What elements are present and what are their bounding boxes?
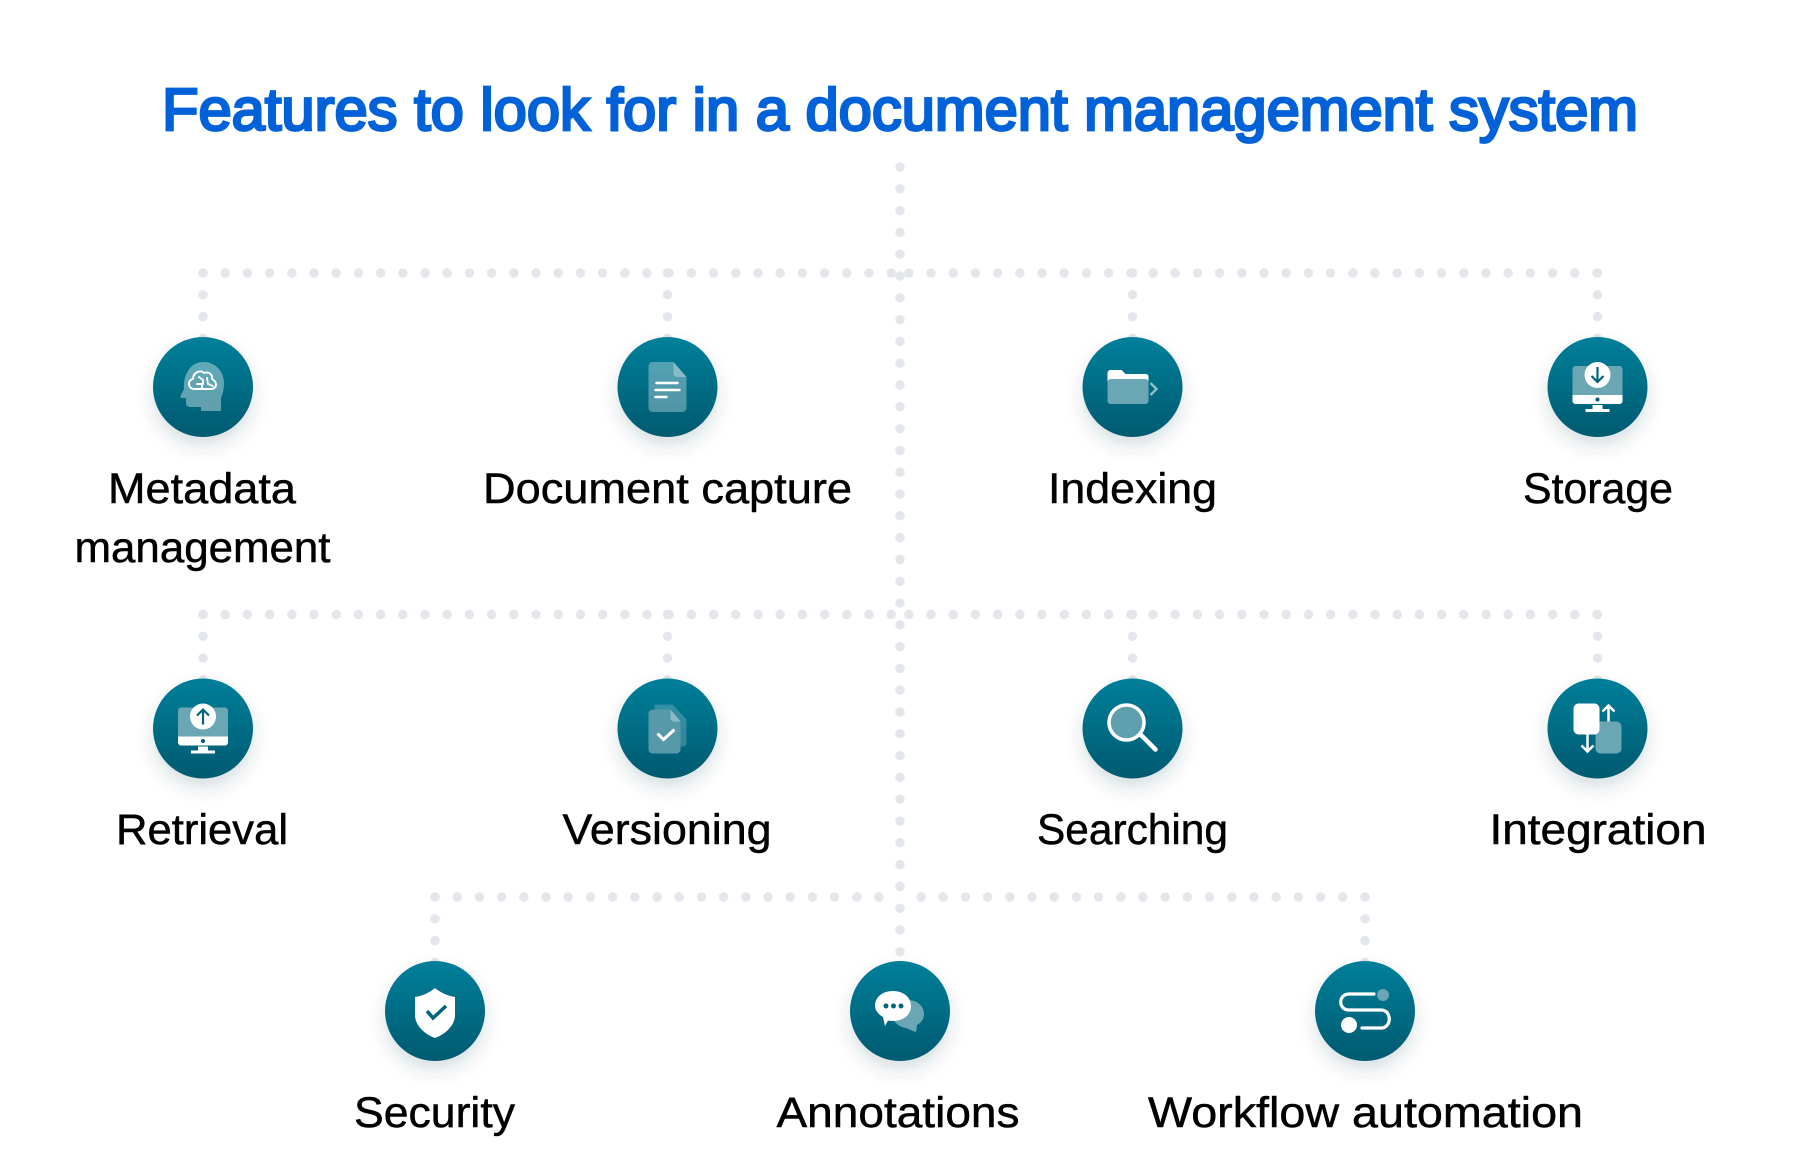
label: Metadata [108, 465, 296, 513]
label: Indexing [1048, 465, 1217, 513]
label: management [74, 524, 331, 572]
icon badge: metadata head [153, 337, 253, 437]
label: Annotations [776, 1089, 1020, 1137]
feature: Security [354, 961, 516, 1137]
icon badge: magnifier [1082, 678, 1182, 778]
feature: Searching [1037, 678, 1228, 854]
label: Document capture [483, 465, 852, 513]
feature: Metadata management [74, 337, 331, 572]
icon badge: chat bubbles [850, 961, 950, 1061]
icon badge: document [618, 337, 718, 437]
feature: Storage [1523, 337, 1673, 513]
icon badge: versioned documents [618, 678, 718, 778]
icon badge: monitor download [1548, 337, 1648, 437]
dotted connector tree [203, 167, 1598, 970]
label [74, 465, 331, 572]
icon badge: shield [385, 961, 485, 1061]
title: Features to look for in a document management system [162, 77, 1638, 143]
icon badge: exchange [1548, 678, 1648, 778]
icon badge: workflow path [1315, 961, 1415, 1061]
feature: Annotations [776, 961, 1020, 1137]
label: Storage [1523, 465, 1673, 513]
feature: Indexing [1048, 337, 1217, 513]
icon badge: folder [1082, 337, 1182, 437]
feature: Integration [1490, 678, 1706, 854]
label: Integration [1490, 806, 1706, 854]
label: Workflow automation [1148, 1089, 1583, 1137]
icon badge: monitor upload [153, 678, 253, 778]
label: Versioning [562, 806, 772, 854]
feature: Retrieval [116, 678, 288, 854]
label: Searching [1037, 806, 1228, 854]
feature: Document capture [483, 337, 852, 513]
label: Retrieval [116, 806, 288, 854]
label: Security [354, 1089, 516, 1137]
feature: Workflow automation [1148, 961, 1583, 1137]
feature: Versioning [562, 678, 772, 854]
